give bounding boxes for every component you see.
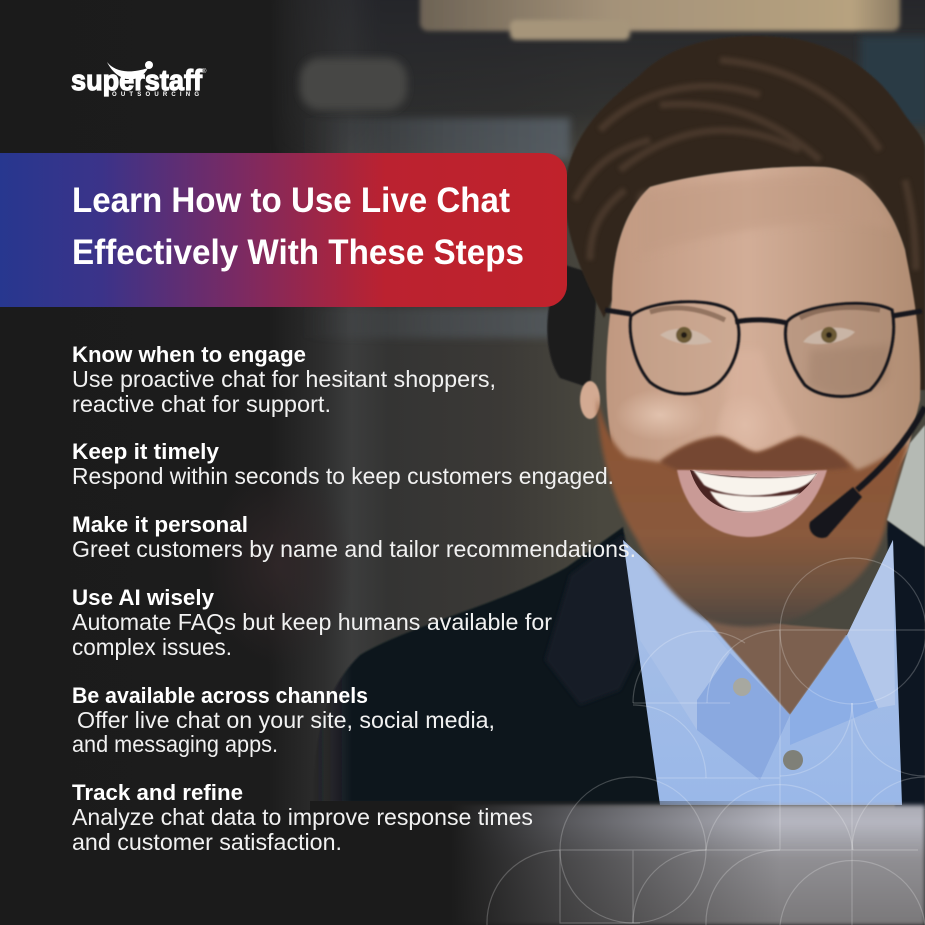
step: know when to engage: Know when to engage <box>72 342 306 367</box>
left collar interior <box>697 653 790 780</box>
step: know when to engage <box>72 342 496 417</box>
teeth <box>693 470 817 512</box>
mouth <box>677 470 827 537</box>
step: use AI wisely: Automate FAQs but keep humans available for <box>72 609 552 635</box>
step: know when to engage: reactive chat for support. <box>72 391 331 417</box>
step: keep it timely <box>72 439 614 489</box>
ear <box>580 381 600 419</box>
step: be available across channels: Offer live chat on your site, social media, <box>77 707 495 733</box>
title banner <box>0 153 567 307</box>
hair <box>564 36 925 390</box>
step: track and refine: Track and refine <box>72 780 243 805</box>
step: be available across channels: Be available across channels <box>72 683 368 708</box>
suit jacket <box>312 527 670 805</box>
step: use AI wisely: complex issues. <box>72 634 232 660</box>
foreground laptop screen <box>310 801 925 925</box>
neck shadow <box>700 612 850 715</box>
step: keep it timely: Respond within seconds to keep customers engaged. <box>72 463 614 489</box>
shirt buttons <box>733 678 803 770</box>
beard <box>597 397 908 627</box>
step: track and refine <box>72 780 533 855</box>
step: make it personal: Greet customers by name and tailor recommendations. <box>72 536 636 562</box>
title text: Effectively With These Steps <box>72 233 524 272</box>
microphone boom <box>809 407 925 538</box>
step: make it personal: Make it personal <box>72 512 248 537</box>
step: use AI wisely <box>72 585 552 660</box>
right collar interior <box>790 635 878 745</box>
step: be available across channels: and messaging apps. <box>72 731 278 757</box>
right collar <box>847 540 895 708</box>
step: know when to engage: Use proactive chat for hesitant shoppers, <box>72 366 496 392</box>
decorative line pattern <box>487 558 925 925</box>
jacket lapel <box>545 535 645 705</box>
logo: superstaff outsourcing: ® <box>202 68 207 75</box>
title text: Learn How to Use Live Chat <box>72 181 510 220</box>
glasses <box>605 302 922 396</box>
step: make it personal <box>72 512 636 562</box>
light wall behind right side <box>887 425 925 547</box>
step: track and refine: and customer satisfaction. <box>72 829 342 855</box>
eyes <box>650 307 880 345</box>
blurred office backdrop <box>234 0 925 810</box>
forehead shading <box>640 176 895 255</box>
moustache <box>660 437 850 471</box>
cheek and nose highlights <box>615 345 890 462</box>
logo: superstaff outsourcing: superstaff <box>71 65 202 97</box>
hair highlights <box>575 60 916 270</box>
logo: superstaff outsourcing: OUTSOURCING <box>112 92 199 98</box>
step: track and refine: Analyze chat data to improve response times <box>72 804 533 830</box>
shirt body <box>623 540 902 805</box>
man in headset photo illustration <box>310 36 925 925</box>
step: be available across channels <box>72 683 495 757</box>
step: use AI wisely: Use AI wisely <box>72 585 215 610</box>
face <box>606 167 920 560</box>
title text <box>72 181 524 272</box>
jacket right side <box>887 520 925 810</box>
left collar <box>623 540 730 730</box>
step: keep it timely: Keep it timely <box>72 439 220 464</box>
headset ear cup <box>547 265 598 388</box>
